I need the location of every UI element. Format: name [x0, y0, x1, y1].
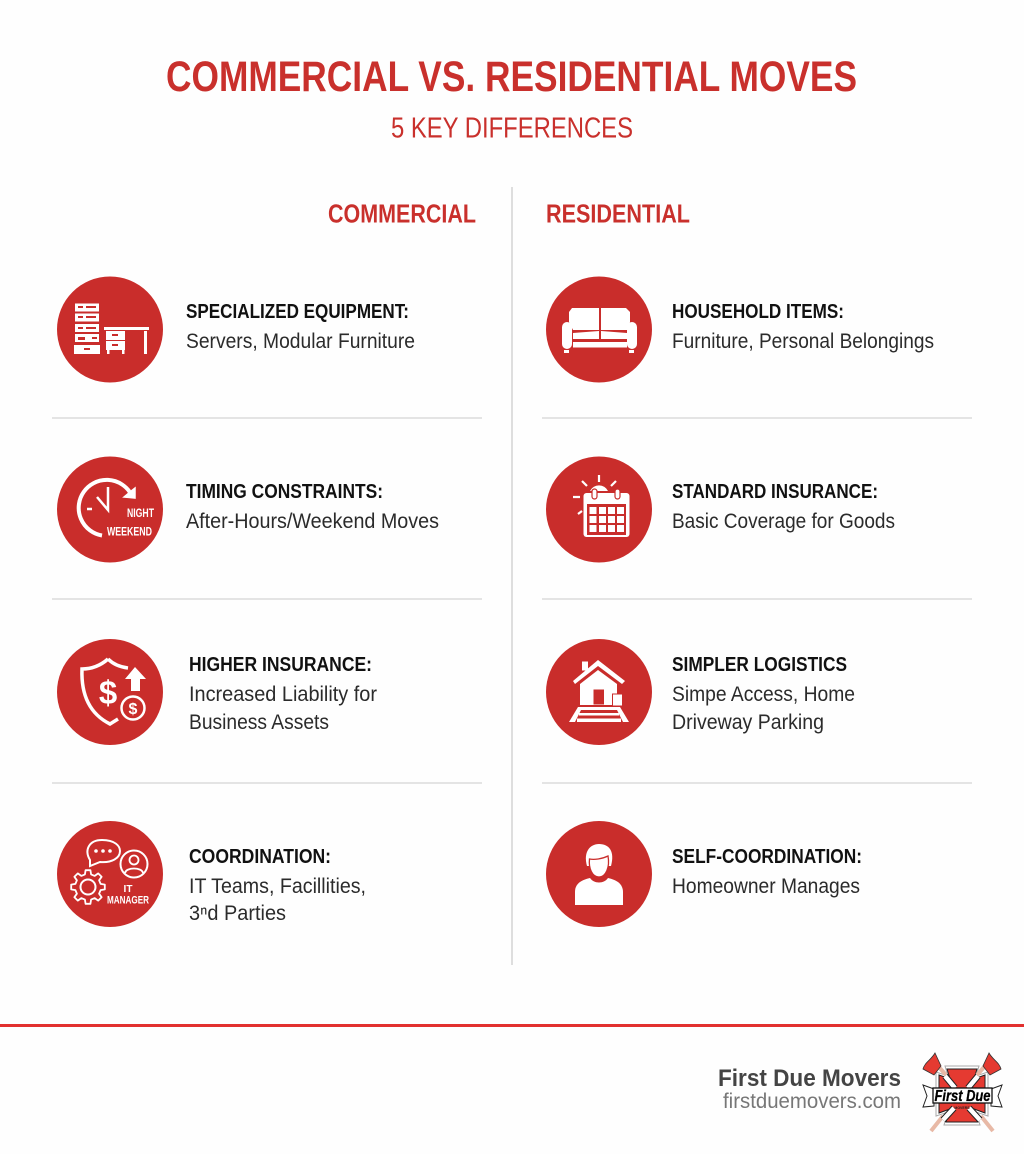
description: Simpe Access, Home — [672, 683, 855, 706]
subtitle: 5 KEY DIFFERENCES — [391, 112, 633, 144]
description: Increased Liability for — [189, 683, 377, 706]
logo: First Due crossed axes badge — [923, 1053, 1002, 1131]
icon: shield with dollar — [57, 639, 163, 745]
panel: timing constraints — [57, 456, 439, 562]
icon: sofa — [546, 276, 652, 382]
heading: STANDARD INSURANCE: — [672, 481, 878, 503]
heading: TIMING CONSTRAINTS: — [186, 481, 383, 503]
heading: SIMPLER LOGISTICS — [672, 654, 847, 676]
panel: household items — [546, 276, 934, 382]
panel: standard insurance — [546, 456, 895, 562]
heading: HIGHER INSURANCE: — [189, 654, 372, 676]
description: 3ⁿd Parties — [189, 902, 286, 925]
icon: calendar with sun rays — [546, 456, 652, 562]
description: After-Hours/Weekend Moves — [186, 510, 439, 533]
icon: clock night weekend: WEEKEND — [107, 526, 152, 538]
description: Servers, Modular Furniture — [186, 330, 415, 353]
footer website: firstduemovers.com — [723, 1090, 901, 1113]
panel: self-coordination — [546, 821, 862, 927]
heading: HOUSEHOLD ITEMS: — [672, 301, 844, 323]
footer brand name: First Due Movers — [718, 1065, 901, 1092]
icon: house with driveway — [546, 639, 652, 745]
logo: First Due crossed axes badge: MOVERS — [954, 1106, 970, 1110]
heading: COORDINATION: — [189, 846, 331, 868]
column heading: commercial: COMMERCIAL — [328, 198, 476, 228]
title: COMMERCIAL VS. RESIDENTIAL MOVES — [166, 53, 857, 101]
description: Business Assets — [189, 711, 329, 734]
description: IT Teams, Facillities, — [189, 875, 366, 898]
panel: coordination — [57, 821, 366, 927]
description — [189, 875, 366, 925]
icon: server rack and desk — [57, 276, 163, 382]
icon: chat, gear and IT manager: IT — [124, 884, 132, 895]
icon: shield with dollar: $ — [99, 674, 117, 711]
icon: chat, gear and IT manager: MANAGER — [107, 894, 149, 906]
description: Driveway Parking — [672, 711, 824, 734]
heading: SELF-COORDINATION: — [672, 846, 862, 868]
description — [189, 683, 377, 734]
description: Homeowner Manages — [672, 875, 860, 898]
logo: First Due crossed axes badge: First Due — [934, 1088, 991, 1105]
description: Basic Coverage for Goods — [672, 510, 895, 533]
panel: simpler logistics — [546, 639, 855, 745]
panel: specialized equipment — [57, 276, 415, 382]
icon: clock night weekend — [57, 456, 163, 562]
description — [672, 683, 855, 734]
icon: clock night weekend: NIGHT — [127, 508, 154, 520]
icon: chat, gear and IT manager — [57, 821, 163, 927]
icon: homeowner person — [546, 821, 652, 927]
heading: SPECIALIZED EQUIPMENT: — [186, 301, 409, 323]
column heading: residential: RESIDENTIAL — [546, 198, 690, 228]
icon: shield with dollar: $ — [129, 701, 138, 718]
panel: higher insurance — [57, 639, 377, 745]
description: Furniture, Personal Belongings — [672, 330, 934, 353]
